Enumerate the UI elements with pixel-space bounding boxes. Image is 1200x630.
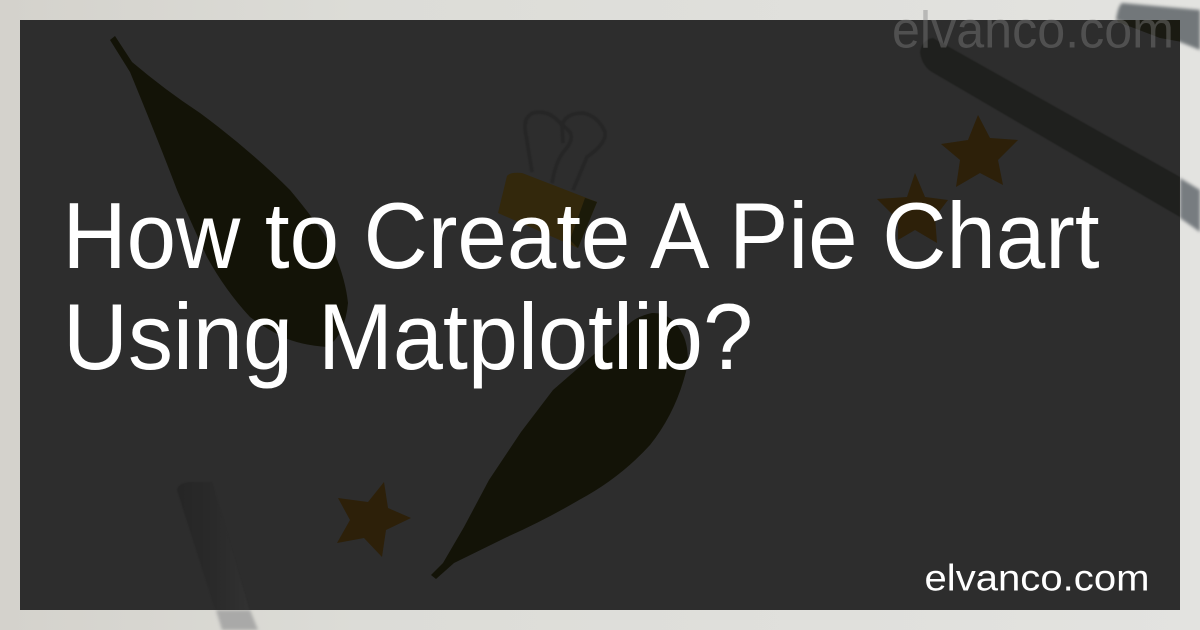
icon: pen top right [920, 38, 1180, 217]
title [62, 183, 1100, 389]
watermark: elvanco.com: elvanco.com [892, 2, 1174, 60]
icon: star bottom [337, 482, 411, 557]
icon: pen bottom left [177, 482, 250, 612]
icon: pen cap at corner [1117, 20, 1180, 42]
icon: upper leaf [110, 36, 348, 347]
title line 2: Using Matplotlib? [63, 284, 753, 389]
icon: binder clip [498, 172, 597, 248]
title line 1: How to Create A Pie Chart [62, 183, 1100, 288]
icon: star middle right [877, 173, 948, 243]
icon: star top right [941, 115, 1018, 187]
site name: elvanco.com [924, 558, 1150, 598]
icon: lower leaf [431, 313, 688, 579]
